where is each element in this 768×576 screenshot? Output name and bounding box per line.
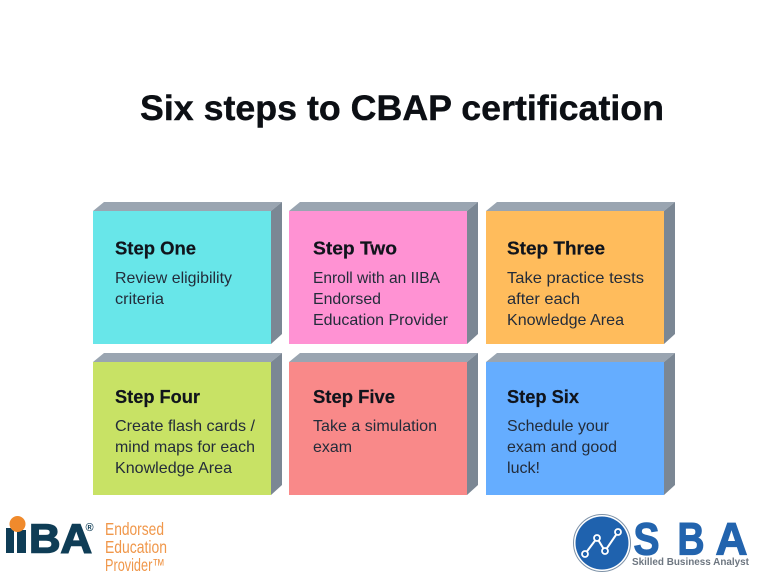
panel: step one: Step One [115,238,196,258]
logo: SBA skilled business analyst: B [678,514,704,564]
panel: step three: after each [507,291,580,308]
panel: step one: Review eligibility [115,270,232,287]
panel: step three: Take practice tests [507,270,644,287]
panel: step four: Create flash cards / [115,418,256,435]
panel: step six [486,353,675,495]
panel: step five: Take a simulation [313,418,437,435]
panel: step two: Education Provider [313,312,449,329]
panel: step five: exam [313,439,352,456]
panel: step three: Knowledge Area [507,312,624,329]
panel: step six: Schedule your [507,418,610,435]
panel: step four [93,353,282,495]
logo: IIBA endorsed education provider [6,516,167,575]
panel: step two: Step Two [313,238,397,258]
panel: step four: mind maps for each [115,439,255,456]
logo: IIBA endorsed education provider: Education [105,537,167,557]
logo: IIBA endorsed education provider: ® [86,522,94,534]
logo: SBA skilled business analyst: A [716,514,748,564]
panel: step two [289,202,478,344]
panel: step two: Enroll with an IIBA [313,270,440,287]
panel: step five: Step Five [313,387,395,407]
logo: IIBA endorsed education provider: BA [29,516,92,562]
panel: step four: Step Four [115,387,200,407]
panel: step one: criteria [115,291,164,308]
panel: step three [486,202,675,344]
logo: IIBA endorsed education provider: Endorsed [105,519,164,539]
panel: step six: exam and good [507,439,617,456]
title: Six steps to CBAP certification [140,88,664,128]
logo: SBA skilled business analyst: Skilled Business Analyst [632,556,749,568]
panel: step one [93,202,282,344]
panel: step six: Step Six [507,387,579,407]
panel: step five [289,353,478,495]
panel: step four: Knowledge Area [115,460,232,477]
panel: step three: Step Three [507,238,605,258]
panel: step six: luck! [507,460,540,477]
panel: step two: Endorsed [313,291,381,308]
logo: IIBA endorsed education provider: Provider™ [105,555,165,575]
logo: SBA skilled business analyst [574,514,749,572]
logo: SBA skilled business analyst: S [634,514,660,564]
